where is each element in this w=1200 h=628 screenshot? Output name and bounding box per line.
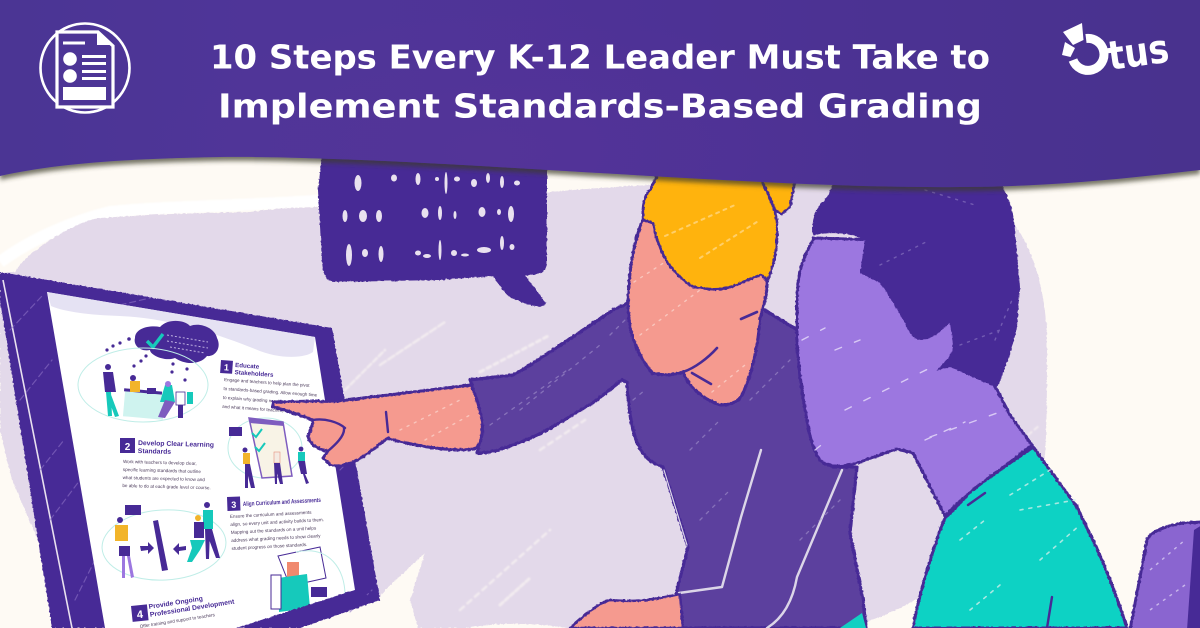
step 2 body text: specific learning standards that outline <box>123 467 201 474</box>
shirt chalk texture <box>490 315 840 540</box>
chalk streaks on background <box>345 322 1040 610</box>
step 1 number box <box>220 360 233 374</box>
speech bubble <box>318 155 547 306</box>
woman's hair bun <box>750 165 798 214</box>
blurred bubble writing, row 1 <box>354 172 520 194</box>
man's face and neck <box>797 238 1032 516</box>
chair chalk texture <box>1150 540 1185 610</box>
step 2 body text: Work with teachers to develop clear, <box>123 459 197 466</box>
document contents <box>63 32 112 100</box>
white chalk band above blob <box>0 200 330 262</box>
step 3 number box: 3 <box>231 500 236 510</box>
woman's shirt and arm <box>470 300 866 628</box>
step 2 heading: Standards <box>138 448 171 456</box>
step 3 body text: student progress on those standards. <box>231 542 307 551</box>
step 4 heading: Provide Ongoing <box>148 595 203 611</box>
step 1 number box: 1 <box>224 362 229 373</box>
monitor frame highlight <box>3 280 72 628</box>
logo wedges <box>1062 23 1084 57</box>
hand chalk texture <box>400 400 470 440</box>
purple header banner <box>0 0 1200 187</box>
woman <box>273 165 866 628</box>
banner background <box>0 0 1200 187</box>
step 2 number box: 2 <box>125 442 131 453</box>
screen illustration: checklist poster <box>228 418 309 488</box>
face chalk texture <box>634 262 745 392</box>
step 2 body text: what students are expected to know and <box>123 475 205 482</box>
monitor bottom edge <box>236 590 380 628</box>
logo ring <box>1073 38 1104 70</box>
step 4 number box: 4 <box>136 609 145 621</box>
pointing hand and forearm <box>273 385 482 466</box>
step 1 body text: to standards-based grading. Allow enough time <box>223 386 318 398</box>
icon circle <box>40 24 130 112</box>
step 3 body text: align, so every unit and activity builds to them. <box>230 517 324 527</box>
chair dark side <box>1187 525 1200 628</box>
step 3 heading: Align Curriculum and Assessments <box>243 497 321 508</box>
document sheet <box>57 32 113 107</box>
finger fold lines <box>313 412 388 451</box>
step 2 heading: Develop Clear Learning <box>138 440 214 449</box>
screen illustration: teacher meeting <box>78 348 208 422</box>
screen header wave <box>47 292 315 357</box>
computer monitor <box>0 272 380 628</box>
banner glow <box>0 0 1200 187</box>
monitor screen <box>47 292 355 628</box>
shirt detail line <box>968 493 1052 628</box>
man's teal shirt <box>913 447 1127 628</box>
screen illustration: aligning curriculum <box>100 502 228 583</box>
screen illustration: cloud with check <box>105 321 219 382</box>
step 2 number box <box>120 438 135 453</box>
hair chalk highlight <box>665 205 760 258</box>
woman's hair <box>643 170 777 289</box>
step 3 body text: Mapping out the standards on a unit helps <box>231 525 317 535</box>
step 1 body text: and what it means for teachers <box>222 404 285 413</box>
lilac background blob <box>0 182 1047 628</box>
step 2 body text: be able to do at each grade level or course. <box>122 483 211 490</box>
second hand at bottom <box>570 594 683 628</box>
frame chalk texture <box>10 296 372 612</box>
step 1 body text: to explain why grading needs to change <box>223 395 303 406</box>
woman's face and neck <box>628 210 767 405</box>
logo wordmark: tus <box>1105 26 1172 80</box>
bubble shape with tail <box>318 155 547 306</box>
man's hair <box>813 170 1020 388</box>
shirt chalk texture <box>960 470 1080 610</box>
step 3 body text: Ensure the curriculum and assessments <box>230 510 312 519</box>
face chalk texture <box>802 328 1000 450</box>
step 3 body text: address what grading needs to show clearly <box>231 533 321 543</box>
step 1 heading: Stakeholders <box>234 369 274 379</box>
man <box>797 170 1127 628</box>
title: Implement Standards-Based Grading <box>218 88 982 126</box>
title: 10 Steps Every K-12 Leader Must Take to <box>210 38 990 76</box>
step 3 number box <box>227 497 240 511</box>
Otus logo <box>1062 23 1172 80</box>
woman's jaw line <box>683 312 757 384</box>
step 1 heading: Educate <box>235 362 260 371</box>
blurred bubble writing, row 2 <box>342 206 514 222</box>
hair chalk texture <box>880 190 1012 345</box>
cardigan lapel lines <box>664 450 842 628</box>
title <box>210 38 990 126</box>
step 4 heading: Professional Development <box>149 598 236 619</box>
document icon <box>40 24 130 112</box>
step 4 number box <box>131 604 149 622</box>
screen illustration: online learning devices <box>271 547 345 612</box>
monitor frame <box>0 272 380 628</box>
purple chair at right <box>1130 522 1200 628</box>
blurred bubble writing, row 3 <box>346 236 514 266</box>
step 1 body text: Engage and teachers to help plan the pivot <box>224 377 310 388</box>
small teal sleeve corner <box>840 613 866 628</box>
